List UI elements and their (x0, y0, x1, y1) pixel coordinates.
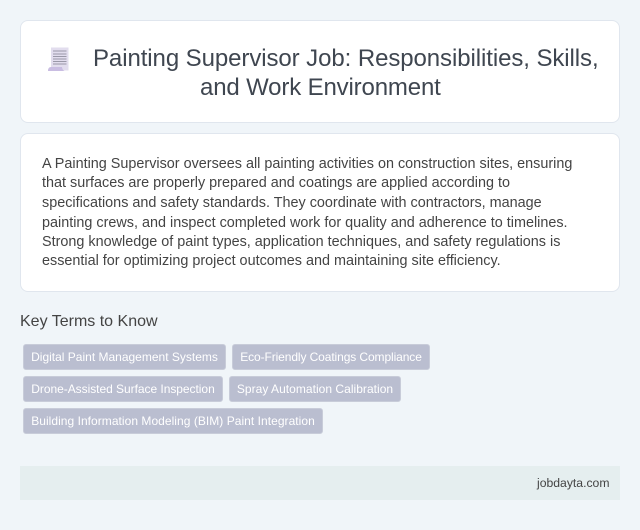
title line 2: and Work Environment (200, 74, 441, 101)
description paragraph: painting crews, and inspect completed work for quality and adherence to timelines. (42, 215, 568, 231)
description paragraph: Strong knowledge of paint types, application techniques, and safety regulations is (42, 234, 560, 250)
panel: title card (20, 20, 620, 123)
tag: drone-assisted inspection (23, 376, 223, 402)
tag: BIM paint integration: Building Information Modeling (BIM) Paint Integration (31, 414, 315, 428)
footer source text: jobdayta.com (537, 476, 610, 490)
description paragraph (42, 156, 572, 269)
tag: BIM paint integration (23, 408, 323, 434)
tag: spray automation (229, 376, 401, 402)
icon: paper scroll document (48, 48, 68, 71)
title line 1: Painting Supervisor Job: Responsibilities, Skills, (93, 45, 599, 72)
tag: spray automation: Spray Automation Calibration (237, 382, 393, 396)
tag: digital paint management (23, 344, 226, 370)
tag: eco-friendly coatings: Eco-Friendly Coatings Compliance (240, 350, 422, 364)
tag: eco-friendly coatings (232, 344, 430, 370)
description paragraph: specifications and safety standards. They coordinate with contractors, manage (42, 195, 542, 211)
tag list (23, 344, 430, 434)
tag: drone-assisted inspection: Drone-Assisted Surface Inspection (31, 382, 215, 396)
description paragraph: that surfaces are properly prepared and coatings are applied according to (42, 175, 510, 191)
description paragraph: essential for optimizing project outcomes and maintaining site efficiency. (42, 253, 501, 269)
heading: key terms: Key Terms to Know (20, 313, 158, 330)
panel: description card (20, 133, 620, 292)
tag: digital paint management: Digital Paint Management Systems (31, 350, 218, 364)
footer bar (20, 466, 620, 500)
description paragraph: A Painting Supervisor oversees all painting activities on construction sites, ensuring (42, 156, 572, 172)
